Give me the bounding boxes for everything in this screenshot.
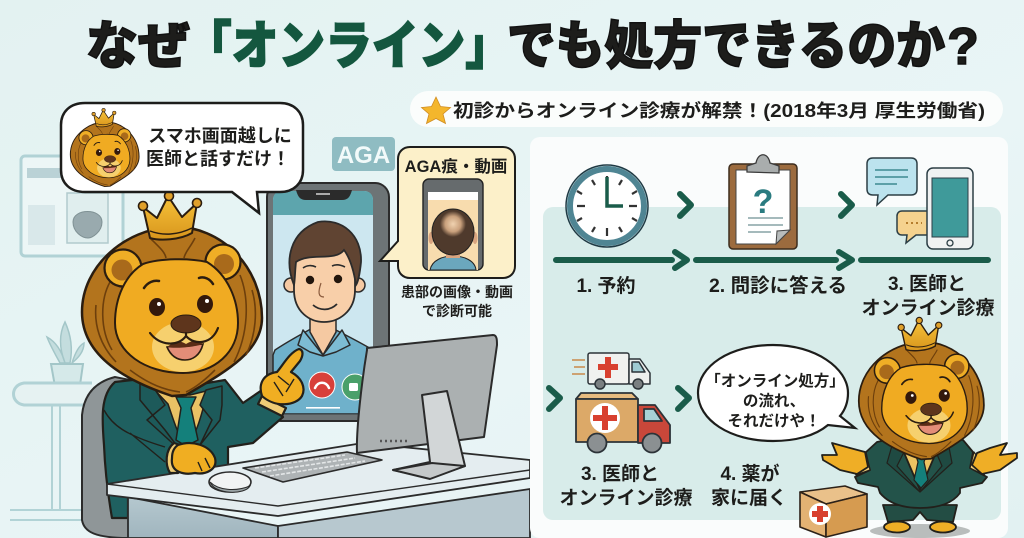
icon: small delivery truck (572, 353, 650, 389)
icon: star (422, 97, 450, 124)
step 3 delivery label (559, 463, 693, 509)
step 3 label: 3. 医師と (888, 273, 966, 295)
desk (107, 443, 530, 538)
AGA caption: 患部の画像・動画 (401, 284, 513, 300)
large lion head (82, 192, 262, 396)
step 3 label: オンライン診療 (861, 297, 995, 319)
step 3 label (861, 273, 995, 319)
speech bubble: that's all: の流れ、 (743, 392, 805, 410)
call buttons (309, 372, 368, 400)
panel: flow steps (530, 137, 1017, 538)
bubble text: スマホ画面越しに (148, 126, 292, 146)
icon: clock (566, 165, 648, 247)
title: なぜ (86, 18, 190, 76)
speech bubble: lion with phone: 医師と話すだけ！ (146, 149, 290, 169)
step 3 delivery label: 3. 医師と (581, 463, 659, 485)
arrow chevrons top row (680, 194, 852, 216)
small lion in suit (822, 317, 1017, 538)
lion body in teal suit (103, 349, 304, 518)
lion raised hand (258, 349, 304, 416)
step 4 label (711, 462, 787, 509)
step 1 label: 1. 予約 (576, 275, 636, 297)
icon: phone with chat bubbles (867, 158, 973, 249)
AGA tag: AGA (337, 142, 390, 169)
small lion icon (70, 108, 139, 187)
pill: 2018 notice: 初診からオンライン診療が解禁！(2018年3月 厚生労働省) (453, 100, 985, 121)
speech bubble: that's all (698, 345, 855, 441)
AGA photo callout (380, 147, 515, 278)
wall poster (21, 156, 123, 256)
hair photo on phone (423, 179, 483, 270)
small lion head (859, 317, 984, 459)
keyboard (243, 452, 382, 482)
title: 「オンライン」 (185, 18, 512, 76)
title: ? (947, 18, 979, 76)
step 4 label: 4. 薬が (720, 462, 780, 485)
icon: clipboard with question: ? (753, 183, 773, 221)
chair (82, 377, 130, 538)
phone with doctor video call (267, 183, 389, 421)
speech bubble: that's all: 「オンライン処方」 (705, 371, 845, 390)
pill: 2018 notice (410, 91, 1003, 127)
plant on table (10, 322, 92, 520)
step 3 delivery label: オンライン診療 (559, 487, 693, 509)
title: でも処方できるのか (507, 18, 945, 76)
AGA tag (332, 137, 395, 171)
icon: large delivery truck (576, 393, 670, 452)
step 4 label: 家に届く (711, 487, 787, 509)
doctor (273, 221, 373, 414)
step 2 label: 2. 問診に答える (709, 274, 847, 297)
AGA caption: で診断可能 (422, 303, 492, 319)
AGA caption (401, 284, 513, 319)
arrow chevrons bottom row (549, 388, 689, 409)
icon: clipboard with question (729, 155, 797, 249)
lion resting hand (167, 443, 215, 474)
mouse (209, 472, 251, 492)
speech bubble: lion with phone (61, 103, 303, 213)
icon: medicine box (800, 486, 867, 537)
background office illustration (10, 156, 123, 520)
timeline arrows (556, 252, 988, 268)
title (86, 18, 979, 76)
speech bubble: that's all: それだけや！ (727, 412, 821, 430)
AGA photo callout: AGA痕・動画 (405, 157, 507, 176)
computer monitor (357, 335, 497, 479)
